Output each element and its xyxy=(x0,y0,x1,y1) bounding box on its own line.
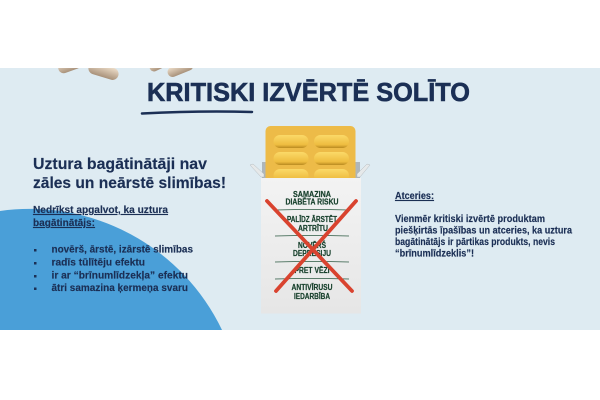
box claims: ARTRĪTU xyxy=(298,224,328,233)
heading: left: zāles un neārstē slimības! xyxy=(33,175,226,192)
icon: blister pack xyxy=(266,126,356,186)
heading: left xyxy=(33,156,226,192)
box claims: IEDARBĪBA xyxy=(294,292,330,301)
text block: reminder: piešķirtās īpašības un atceries, ka uztura xyxy=(395,226,572,236)
text block: claims list: novērš, ārstē, izārstē slimības xyxy=(52,245,193,256)
box claims xyxy=(286,190,339,301)
text block: claims list xyxy=(33,205,193,294)
heading: left: Uztura bagātinātāji nav xyxy=(33,156,207,173)
medicine box xyxy=(261,178,361,314)
box claims: PRET VĒZI xyxy=(294,266,330,275)
title underline xyxy=(142,112,252,114)
box claims: SAMAZINA xyxy=(293,190,331,199)
icon: box back and flaps xyxy=(250,162,370,180)
text block: claims list: ātri samazina ķermeņa svaru xyxy=(52,283,188,294)
text block: reminder: “brīnumlīdzeklis”! xyxy=(395,248,474,260)
background panel xyxy=(0,68,600,330)
blue circle xyxy=(0,209,222,330)
text block: reminder: Vienmēr kritiski izvērtē produktam xyxy=(395,214,545,225)
text block: reminder xyxy=(395,191,572,260)
title: KRITISKI IZVĒRTĒ SOLĪTO xyxy=(147,77,470,107)
text block: claims list: Nedrīkst apgalvot, ka uztura xyxy=(33,205,168,216)
box claims: DIABĒTA RISKU xyxy=(286,198,339,206)
box claims: ANTIVĪRUSU xyxy=(292,283,333,292)
text block: claims list: ir ar “brīnumlīdzekļa” efektu xyxy=(52,271,188,282)
text block: claims list: bagātinātājs: xyxy=(33,218,95,229)
red cross xyxy=(267,201,356,291)
text block: claims list: radīs tūlītēju efektu xyxy=(52,258,145,269)
text block: reminder: bagātinātājs ir pārtikas produkts, nevis xyxy=(395,237,555,248)
box claims: DEPRESIJU xyxy=(293,249,331,258)
box claims: NOVĒRŠ xyxy=(298,241,327,250)
icon: capsules xyxy=(58,68,193,80)
box claims: PALĪDZ ĀRSTĒT xyxy=(287,215,337,224)
text block: reminder: Atceries: xyxy=(395,191,434,202)
